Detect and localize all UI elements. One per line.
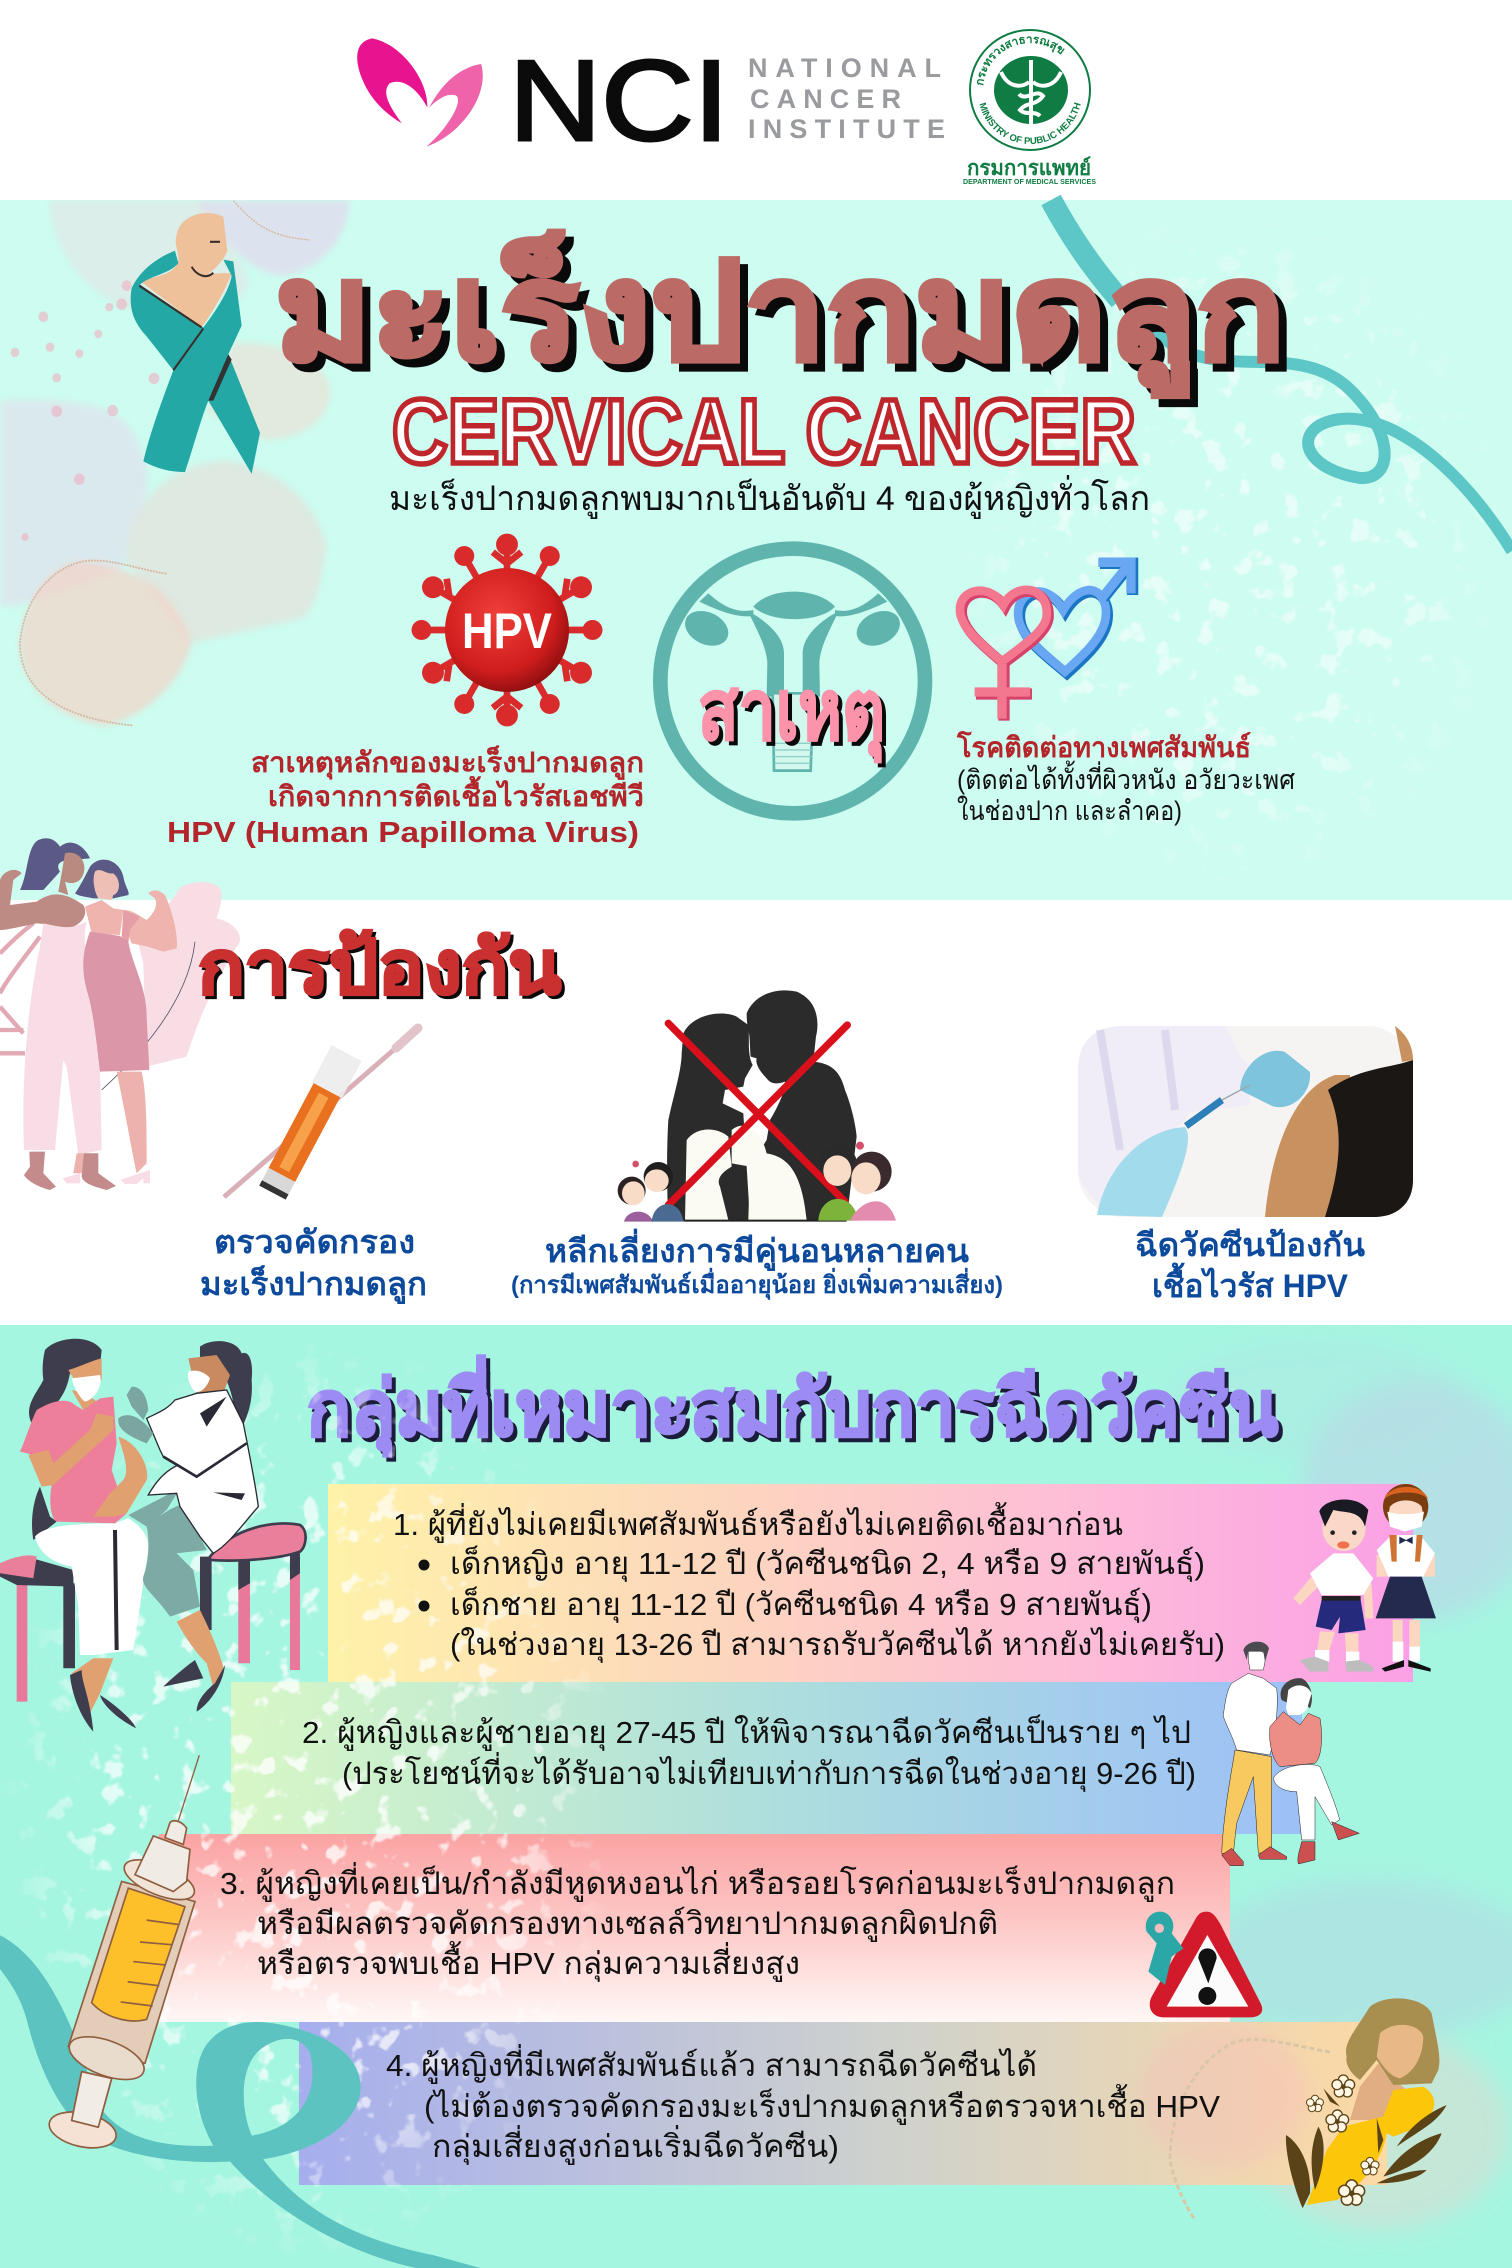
icon: Ministry of Public Health seal: MINISTRY OF PUBLIC HEALTH [980,102,1081,144]
label: avoid multiple partners [511,1228,1003,1301]
panel: prevention [0,838,1512,1325]
label: screening: มะเร็งปากมดลูก [200,1264,427,1305]
band 4 text: 4. ผู้หญิงที่มีเพศสัมพันธ์แล้ว สามารถฉีดวัคซีนได้ [386,2044,1037,2084]
label: vaccination: ฉีดวัคซีนป้องกัน [1135,1227,1365,1263]
statement: มะเร็งปากมดลูกพบมากเป็นอันดับ 4 ของผู้หญิงทั่วโลก [389,475,1150,519]
text: sexually transmitted: (ติดต่อได้ทั้งที่ผิวหนัง อวัยวะเพศ [957,760,1295,795]
label: screening [200,1224,427,1305]
text: main cause HPV: HPV (Human Papilloma Virus) [167,817,639,849]
gradient bands [159,1484,1413,2220]
teal ribbon streamer [1051,200,1512,551]
icon: warning with ribbon [1146,1912,1262,2017]
band 1 text: (ในช่วงอายุ 13-26 ปี สามารถรับวัคซีนได้ หากยังไม่เคยรับ) [450,1627,1225,1664]
band 4 text: กลุ่มเสี่ยงสูงก่อนเริ่มฉีดวัคซีน) [432,2125,839,2166]
band 3 text: 3. ผู้หญิงที่เคยเป็น/กำลังมีหูดหงอนไก่ หรือรอยโรคก่อนมะเร็งปากมดลูก [220,1862,1175,1902]
band 3 text: หรือมีผลตรวจคัดกรองทางเซลล์วิทยาปากมดลูกผิดปกติ [257,1906,998,1942]
illustration: adult couple [1222,1642,1359,1866]
icon: screening swab [224,1028,418,1201]
icon: kids couple right [818,1142,896,1221]
icon: couple silhouette crossed out [667,990,857,1221]
NCI wordmark: NCI [509,38,729,165]
text: main cause HPV [167,745,644,849]
National Cancer Institute wordmark: CANCER [750,84,901,114]
heading: target groups: กลุ่มที่เหมาะสมกับการฉีดวัคซีน [307,1355,1278,1457]
icon: uterus in circle [660,549,925,813]
icon: Ministry of Public Health seal [963,29,1096,186]
label: vaccination: เชื้อไวรัส HPV [1152,1262,1349,1304]
illustration: school kids [1293,1484,1436,1672]
band 3 text [220,1862,1175,1983]
header band [357,29,1096,186]
band 1 text: 1. ผู้ที่ยังไม่เคยมีเพศสัมพันธ์หรือยังไม่เคยติดเชื้อมาก่อน [393,1502,1123,1543]
label: avoid multiple partners: (การมีเพศสัมพันธ์เมื่ออายุน้อย ยิ่งเพิ่มความเสี่ยง) [511,1267,1003,1301]
icon: Ministry of Public Health seal: DEPARTMENT OF MEDICAL SERVICES [963,177,1096,186]
heading: prevention: การป้องกัน [201,929,564,1012]
panel: vaccine target groups [0,1325,1512,2268]
text: sexually transmitted: ในช่องปาก และลำคอ) [957,795,1182,826]
illustration: patient and doctor [0,1339,306,1732]
red cross [668,1023,847,1205]
band 4 text [386,2044,1220,2166]
text: sexually transmitted [956,730,1295,826]
teal ribbon lower left [0,1935,500,2268]
watercolor blobs right [1230,1364,1512,2237]
text: sexually transmitted: โรคติดต่อทางเพศสัมพันธ์ [956,730,1251,763]
icon: gender hearts [960,562,1133,721]
icon: NCI butterfly logo [357,38,483,147]
illustration: woman with flowers [1286,1998,1447,2208]
icon: Ministry of Public Health seal: กรมการแพทย์ [967,156,1091,180]
National Cancer Institute wordmark: NATIONAL [748,53,941,83]
icon: HPV virus [415,537,599,723]
National Cancer Institute wordmark [748,53,945,144]
vaccination photo [1078,1026,1413,1217]
cause label: สาเหตุ [702,667,889,767]
band 3 text: หรือตรวจพบเชื้อ HPV กลุ่มความเสี่ยงสูง [257,1941,800,1983]
band 2 text [302,1714,1196,1793]
text: main cause HPV: เกิดจากการติดเชื้อไวรัสเอชพีวี [268,775,644,812]
band 2 text: (ประโยชน์ที่จะได้รับอาจไม่เทียบเท่ากับการฉีดในช่วงอายุ 9-26 ปี) [342,1752,1196,1793]
cause label: สาเหตุ [698,663,885,763]
icon: awareness ribbon figure [131,213,260,474]
subtitle: Cervical Cancer: CERVICAL CANCER [392,381,1136,483]
title: มะเร็งปากมดลูก [275,231,1285,397]
label: avoid multiple partners: หลีกเลี่ยงการมีคู่นอนหลายคน [545,1228,969,1272]
label: screening: ตรวจคัดกรอง [214,1224,415,1260]
icon: kids couple left [618,1161,683,1222]
text: main cause HPV: สาเหตุหลักของมะเร็งปากมดลูก [251,745,644,780]
heading: target groups: กลุ่มที่เหมาะสมกับการฉีดวัคซีน [311,1359,1282,1461]
heading: prevention: การป้องกัน [198,926,561,1009]
panel: what is cervical cancer and causes [0,200,1512,900]
illustration: syringe [46,1755,200,2154]
band 2 text: 2. ผู้หญิงและผู้ชายอายุ 27-45 ปี ให้พิจารณาฉีดวัคซีนเป็นราย ๆ ไป [302,1714,1191,1752]
label: vaccination [1135,1227,1365,1304]
illustration: two women [0,838,240,1190]
band 1 text: เด็กหญิง อายุ 11-12 ปี (วัคซีนชนิด 2, 4 หรือ 9 สายพันธุ์) [450,1545,1205,1583]
band 1 text [393,1502,1225,1664]
band 1 text: เด็กชาย อายุ 11-12 ปี (วัคซีนชนิด 4 หรือ 9 สายพันธุ์) [450,1586,1152,1624]
band 4 text: (ไม่ต้องตรวจคัดกรองมะเร็งปากมดลูกหรือตรวจหาเชื้อ HPV [424,2084,1220,2125]
National Cancer Institute wordmark: INSTITUTE [748,114,945,144]
icon: Ministry of Public Health seal: กระทรวงสาธารณสุข [976,36,1065,86]
icon: HPV virus: HPV [462,603,553,659]
watercolor blobs [0,201,350,726]
title: มะเร็งปากมดลูก [283,239,1293,405]
